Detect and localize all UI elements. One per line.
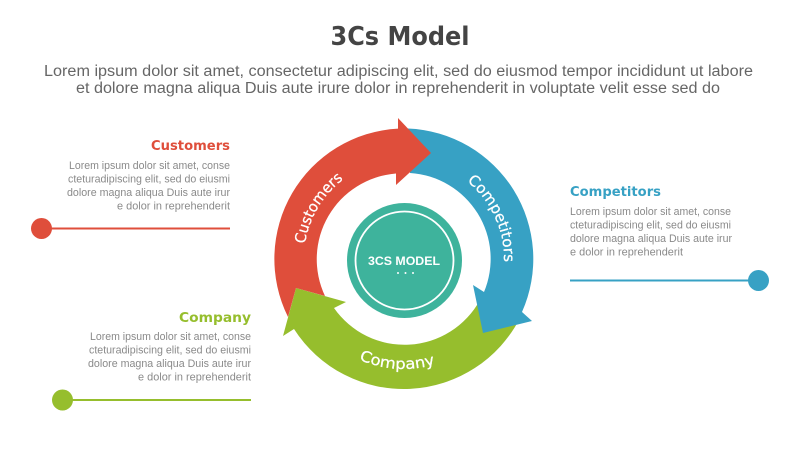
arrow: company [283, 288, 516, 389]
text block: competitors: e dolor in reprehenderit [570, 246, 683, 258]
center circle: 3CS MODEL [368, 254, 440, 268]
heading: competitors: Competitors [570, 185, 661, 200]
text block: competitors: cteturadipiscing elit, sed do eiusmi [570, 220, 731, 232]
text block: customers: e dolor in reprehenderit [117, 200, 230, 212]
text block: company: e dolor in reprehenderit [138, 372, 251, 384]
arrow: company: Company [361, 351, 433, 372]
text block: company: Lorem ipsum dolor sit amet, conse [90, 331, 251, 343]
text block: company: dolore magna aliqua Duis aute irur [88, 358, 251, 370]
heading: customers: Customers [151, 139, 230, 154]
text block: customers: cteturadipiscing elit, sed do eiusmi [68, 174, 230, 186]
arrow: customers: Customers [294, 174, 342, 242]
arrow: competitors: Competitors [469, 175, 513, 262]
text block: company: cteturadipiscing elit, sed do eiusmi [89, 344, 251, 356]
title: 3Cs Model [330, 22, 470, 52]
marker line: company [52, 390, 251, 410]
center circle [347, 203, 462, 318]
panel: competitors [570, 185, 769, 291]
text block: competitors: Lorem ipsum dolor sit amet, conse [570, 206, 731, 218]
panel: customers [31, 139, 230, 239]
text block: competitors [570, 206, 732, 258]
text block: customers: Lorem ipsum dolor sit amet, conse [69, 160, 230, 172]
heading: company: Company [179, 311, 252, 326]
subtitle: Lorem ipsum dolor sit amet, consectetur adipiscing elit, sed do eiusmod tempor incididunt ut labore [44, 63, 753, 80]
panel: company [52, 311, 252, 410]
text block: competitors: dolore magna aliqua Duis aute irur [570, 233, 732, 245]
subtitle [44, 63, 753, 97]
text block: customers: dolore magna aliqua Duis aute irur [67, 187, 230, 199]
text block: company [88, 331, 251, 384]
chart: circular arrow cycle [274, 118, 534, 389]
text block: customers [67, 160, 230, 212]
arrow: competitors [408, 128, 534, 333]
subtitle: et dolore magna aliqua Duis aute irure dolor in reprehenderit in voluptate velit esse sed do [76, 80, 720, 97]
arrow: customers [274, 118, 431, 317]
marker line: customers [31, 218, 230, 239]
marker line: competitors [570, 270, 769, 291]
